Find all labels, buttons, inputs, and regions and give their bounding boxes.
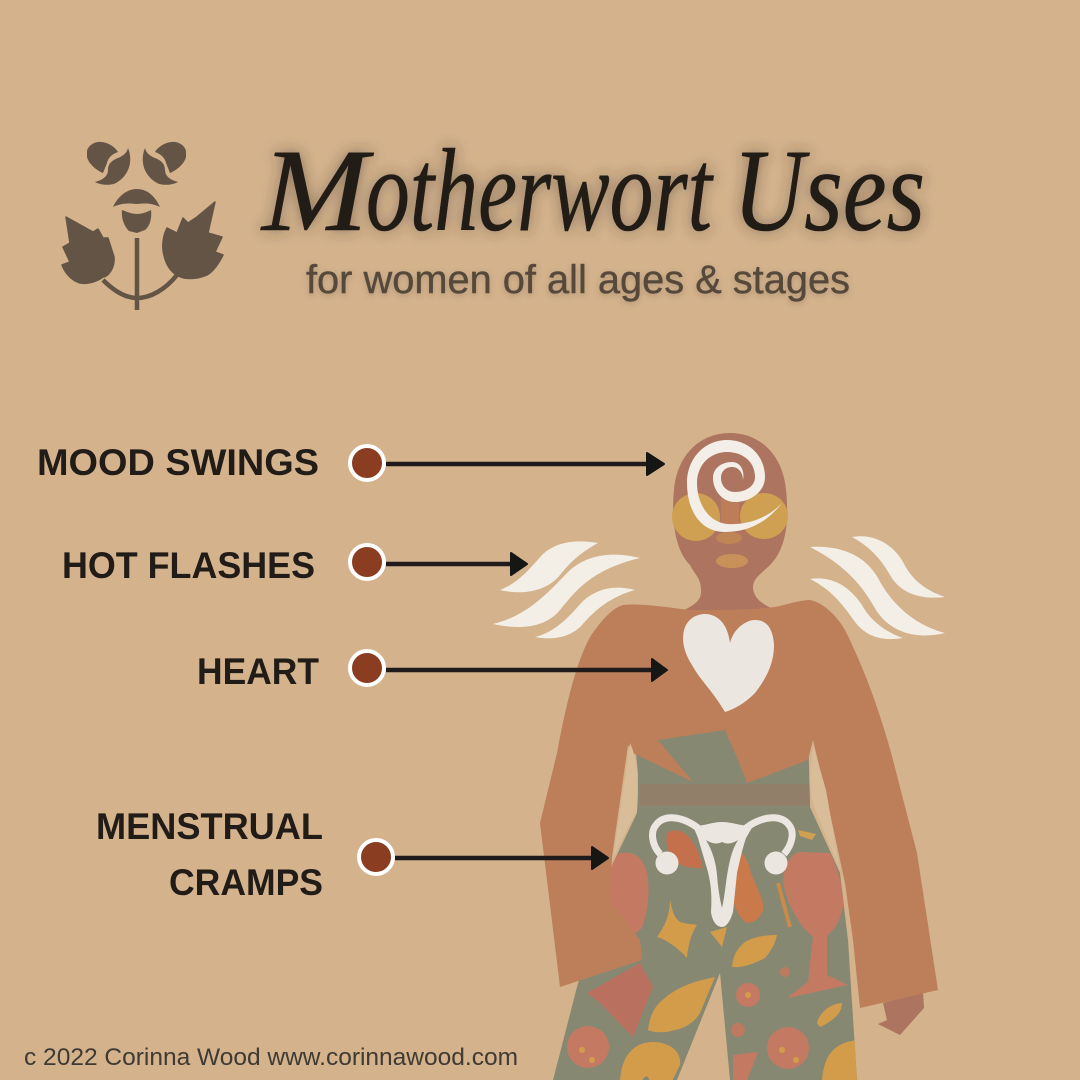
label: menstrual cramps: MENSTRUAL	[96, 806, 323, 847]
torso and sleeves	[540, 600, 938, 1008]
hot flash waves	[493, 536, 945, 639]
title: otherwort	[366, 125, 714, 256]
arrow: menstrual cramps	[359, 840, 608, 874]
title: Uses	[733, 125, 925, 256]
arrow: mood swings	[350, 446, 664, 480]
sunglasses	[672, 493, 788, 541]
uterus	[653, 818, 792, 927]
spiral: mood swings	[687, 440, 782, 532]
footer credit: c 2022 Corinna Wood www.corinnawood.com	[24, 1044, 518, 1071]
subtitle: for women of all ages & stages	[306, 258, 850, 302]
label: heart: HEART	[197, 651, 319, 692]
figure: woman illustration	[493, 433, 945, 1080]
label: menstrual cramps: CRAMPS	[169, 862, 323, 903]
hand	[878, 992, 924, 1035]
label: mood swings: MOOD SWINGS	[37, 442, 319, 483]
facial features	[716, 498, 748, 568]
heart	[683, 614, 774, 712]
arrow: heart	[350, 651, 667, 685]
head and neck	[673, 433, 787, 612]
title: M	[260, 125, 374, 256]
label: hot flashes: HOT FLASHES	[62, 545, 315, 586]
label: menstrual cramps	[96, 806, 323, 903]
arrow: hot flashes	[350, 545, 527, 579]
icon: motherwort plant	[62, 142, 223, 310]
pants	[540, 725, 870, 1080]
arm gaps	[613, 743, 638, 858]
